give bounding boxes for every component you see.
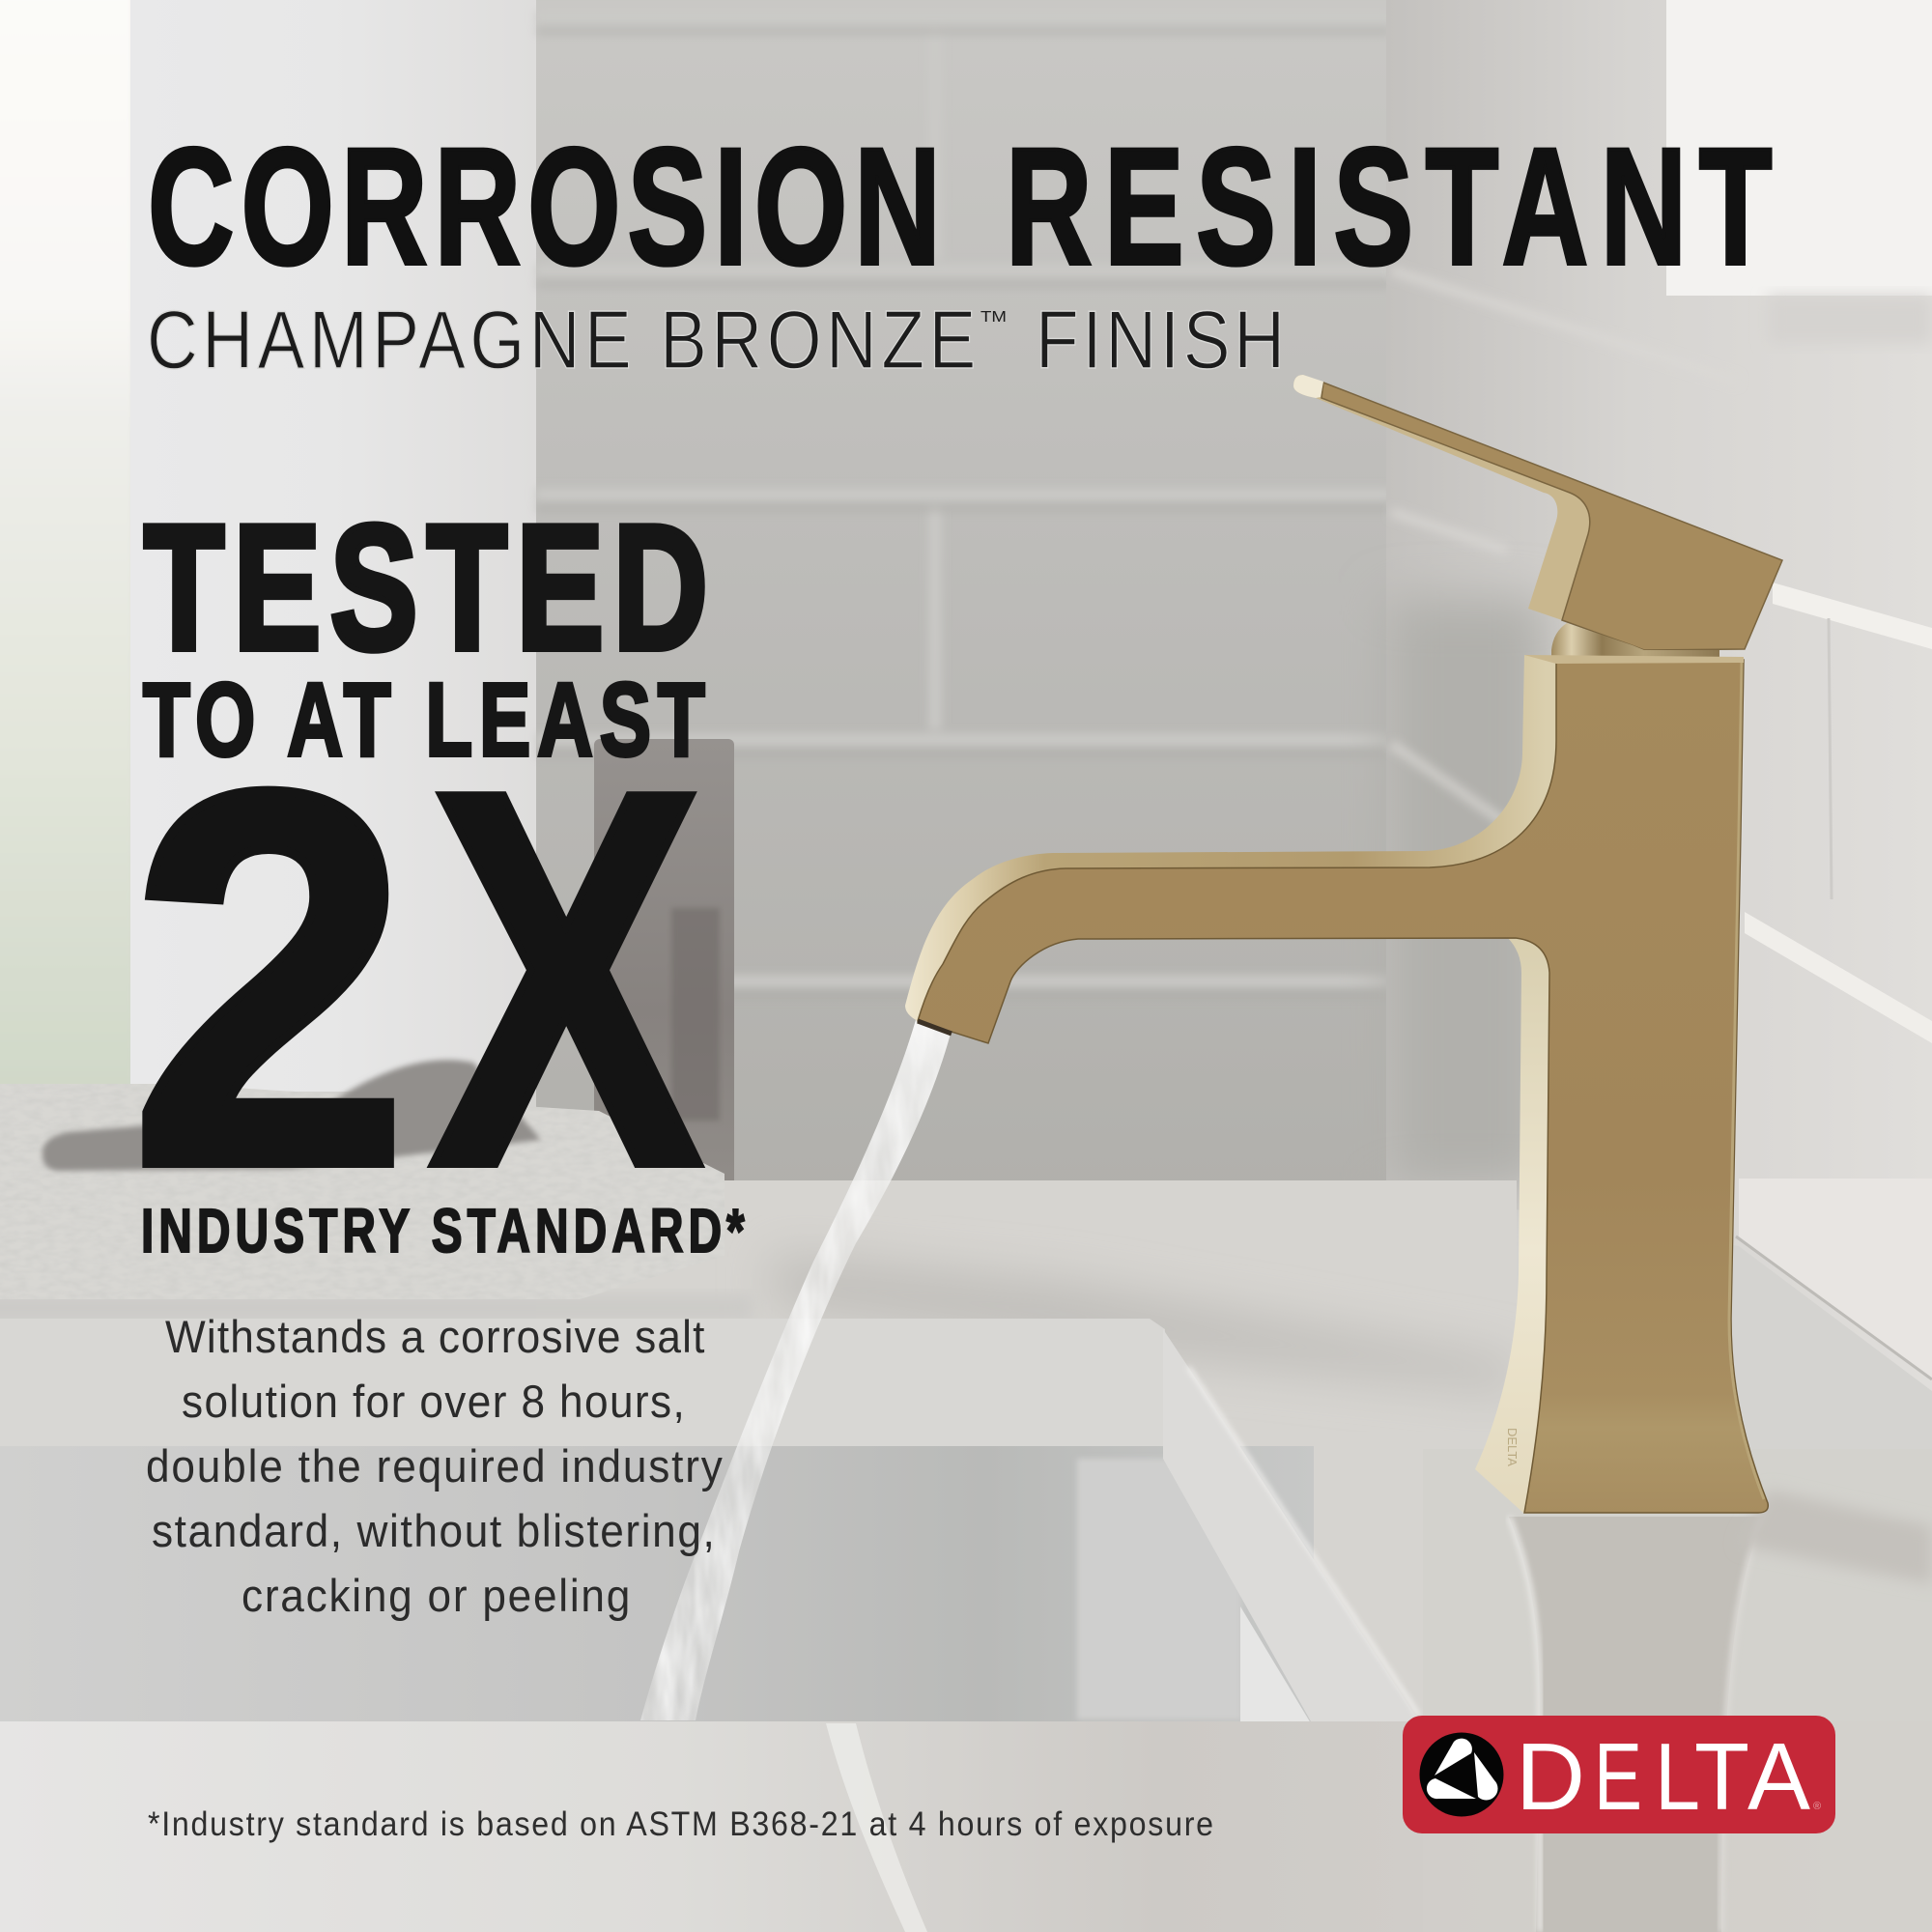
body text xyxy=(146,1312,723,1621)
sink interior xyxy=(0,1446,1314,1721)
delta logo xyxy=(1403,1716,1835,1833)
pillar xyxy=(130,0,536,1092)
logo wordmark xyxy=(1516,1723,1811,1830)
water stream xyxy=(640,1020,951,1932)
logo wordmark: T xyxy=(1694,1723,1749,1830)
front counter xyxy=(0,1721,1932,1932)
body text: standard, without blistering, xyxy=(152,1506,715,1556)
faucet xyxy=(905,375,1782,1514)
body text: double the required industry xyxy=(146,1441,723,1492)
faucet: body right edge xyxy=(1729,661,1764,1499)
faucet: body top plate xyxy=(1524,655,1744,664)
sink slope xyxy=(1163,1329,1419,1721)
window xyxy=(0,0,133,1092)
title: corrosion resistant: RESISTANT xyxy=(1006,113,1772,299)
faucet: handle outer xyxy=(1293,375,1782,650)
faucet: neck and spout highlight xyxy=(905,655,1556,1021)
logo wordmark: A xyxy=(1747,1723,1811,1830)
faucet: swivel xyxy=(1551,623,1719,659)
subheading: industry standard: INDUSTRY STANDARD* xyxy=(141,1196,745,1265)
heading: to at least: TO AT LEAST xyxy=(143,662,705,779)
body text: cracking or peeling xyxy=(242,1571,630,1621)
faucet reflection xyxy=(1509,1517,1764,1932)
body text: solution for over 8 hours, xyxy=(182,1377,685,1427)
body text: Withstands a corrosive salt xyxy=(165,1312,705,1362)
logo badge xyxy=(1403,1716,1835,1833)
faucet: handle tip xyxy=(1293,375,1323,398)
counter xyxy=(536,1180,1932,1932)
heading: tested: TESTED xyxy=(144,489,708,687)
title: corrosion resistant xyxy=(148,113,1772,299)
logo wordmark: L xyxy=(1655,1723,1700,1830)
faucet: spout tip xyxy=(918,1021,952,1034)
big number: 2X xyxy=(129,680,704,1276)
sink front lip xyxy=(0,1319,1165,1446)
title: corrosion resistant: CORROSION xyxy=(148,113,941,299)
footnote: *Industry standard is based on ASTM B368-21 at 4 hours of exposure xyxy=(148,1806,1213,1843)
faucet: handle face xyxy=(1321,383,1782,650)
faucet: logo mark: DELTA xyxy=(1505,1428,1520,1466)
towel xyxy=(0,1060,753,1321)
foot cast shadow xyxy=(1739,1490,1932,1584)
subtitle: champagne bronze finish: FINISH xyxy=(1036,294,1285,385)
logo wordmark: D xyxy=(1516,1723,1585,1830)
big number: 2X: 2 xyxy=(129,680,410,1276)
faucet: leg highlight xyxy=(1475,927,1551,1514)
water reflection xyxy=(826,1723,927,1932)
logo wordmark: E xyxy=(1594,1723,1642,1830)
subtitle: champagne bronze finish: CHAMPAGNE BRONZE xyxy=(147,294,976,385)
logo mark xyxy=(1420,1733,1503,1816)
tile wall xyxy=(536,0,1391,1198)
right wall xyxy=(1386,0,1932,1391)
big number: 2X: X xyxy=(430,680,704,1276)
counter shadow xyxy=(773,1256,1517,1391)
white cabinet xyxy=(1666,0,1932,296)
bottle xyxy=(594,739,734,1193)
subtitle: champagne bronze finish: TM xyxy=(980,309,1007,326)
logo registered mark: ® xyxy=(1813,1801,1821,1812)
faucet: body and spout xyxy=(918,660,1768,1513)
